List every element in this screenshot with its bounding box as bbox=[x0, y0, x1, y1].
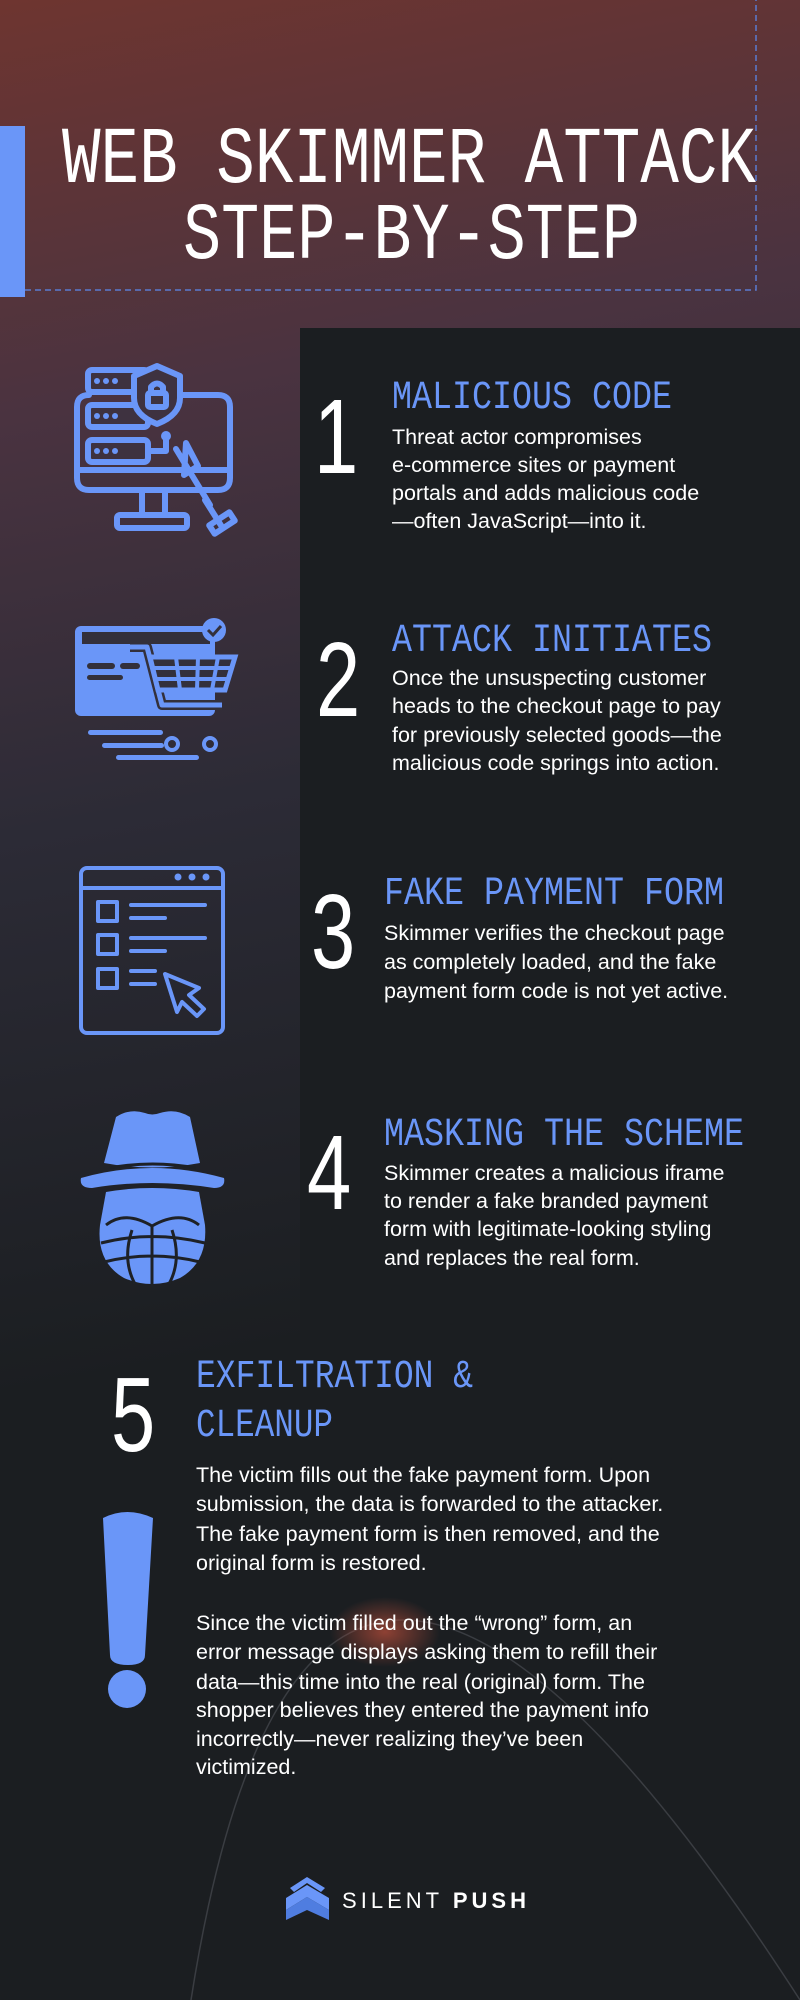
decorative arc bbox=[191, 1597, 800, 2000]
step 1: 1 bbox=[314, 377, 358, 496]
icon: card and cart bbox=[75, 618, 235, 760]
step 5: The victim fills out the fake payment form. Upon bbox=[196, 1463, 650, 1487]
step 5 bbox=[111, 1354, 663, 1779]
step 1 bbox=[314, 375, 699, 533]
title frame bbox=[0, 0, 756, 297]
step 2: for previously selected goods—the bbox=[392, 723, 722, 747]
step 2 bbox=[316, 618, 722, 775]
step 3: Skimmer verifies the checkout page bbox=[384, 921, 725, 945]
step 2: 2 bbox=[316, 620, 360, 739]
step 5: victimized. bbox=[196, 1755, 296, 1779]
step 4: to render a fake branded payment bbox=[384, 1189, 708, 1213]
step 5: The fake payment form is then removed, and the bbox=[196, 1522, 660, 1546]
logo: silent push: SILENT PUSH bbox=[342, 1888, 530, 1913]
step 4: and replaces the real form. bbox=[384, 1246, 640, 1270]
title: STEP-BY-STEP bbox=[183, 190, 640, 282]
step 3: 3 bbox=[311, 872, 355, 991]
step 4 bbox=[307, 1112, 744, 1270]
step 5: EXFILTRATION & bbox=[196, 1354, 473, 1399]
step 5: CLEANUP bbox=[196, 1403, 333, 1448]
step 4: Skimmer creates a malicious iframe bbox=[384, 1161, 725, 1185]
step 3: as completely loaded, and the fake bbox=[384, 950, 716, 974]
icon: spy bbox=[81, 1111, 224, 1287]
step 4: MASKING THE SCHEME bbox=[384, 1112, 744, 1157]
icon: server monitor with syringe bbox=[77, 366, 235, 534]
step 5: shopper believes they entered the payment info bbox=[196, 1698, 649, 1722]
step 4: 4 bbox=[307, 1113, 351, 1232]
logo: silent push bbox=[286, 1877, 530, 1920]
step 5: incorrectly—never realizing they’ve been bbox=[196, 1727, 583, 1751]
step 5: submission, the data is forwarded to the attacker. bbox=[196, 1492, 663, 1516]
step 3: FAKE PAYMENT FORM bbox=[384, 871, 724, 916]
icon: exclamation bbox=[103, 1512, 153, 1708]
step 5: data—this time into the real (original) form. The bbox=[196, 1670, 645, 1694]
step 1: —often JavaScript—into it. bbox=[392, 509, 647, 533]
step 1: Threat actor compromises bbox=[392, 425, 642, 449]
step 2: Once the unsuspecting customer bbox=[392, 666, 706, 690]
title: WEB SKIMMER ATTACK bbox=[62, 114, 756, 206]
step 1: MALICIOUS CODE bbox=[392, 375, 672, 420]
step 4: form with legitimate-looking styling bbox=[384, 1217, 711, 1241]
dark content panel bbox=[300, 328, 800, 2000]
step 5: Since the victim filled out the “wrong” form, an bbox=[196, 1611, 632, 1635]
step 2: malicious code springs into action. bbox=[392, 751, 719, 775]
step 5: original form is restored. bbox=[196, 1551, 427, 1575]
step 5: 5 bbox=[111, 1355, 155, 1474]
step 1: e-commerce sites or payment bbox=[392, 453, 675, 477]
step 3 bbox=[311, 871, 728, 1003]
step 2: ATTACK INITIATES bbox=[392, 618, 712, 663]
icon: payment form browser bbox=[81, 868, 223, 1033]
title bbox=[62, 114, 756, 282]
step 1: portals and adds malicious code bbox=[392, 481, 699, 505]
step 5: error message displays asking them to refill their bbox=[196, 1640, 657, 1664]
step 3: payment form code is not yet active. bbox=[384, 979, 728, 1003]
step 2: heads to the checkout page to pay bbox=[392, 694, 721, 718]
